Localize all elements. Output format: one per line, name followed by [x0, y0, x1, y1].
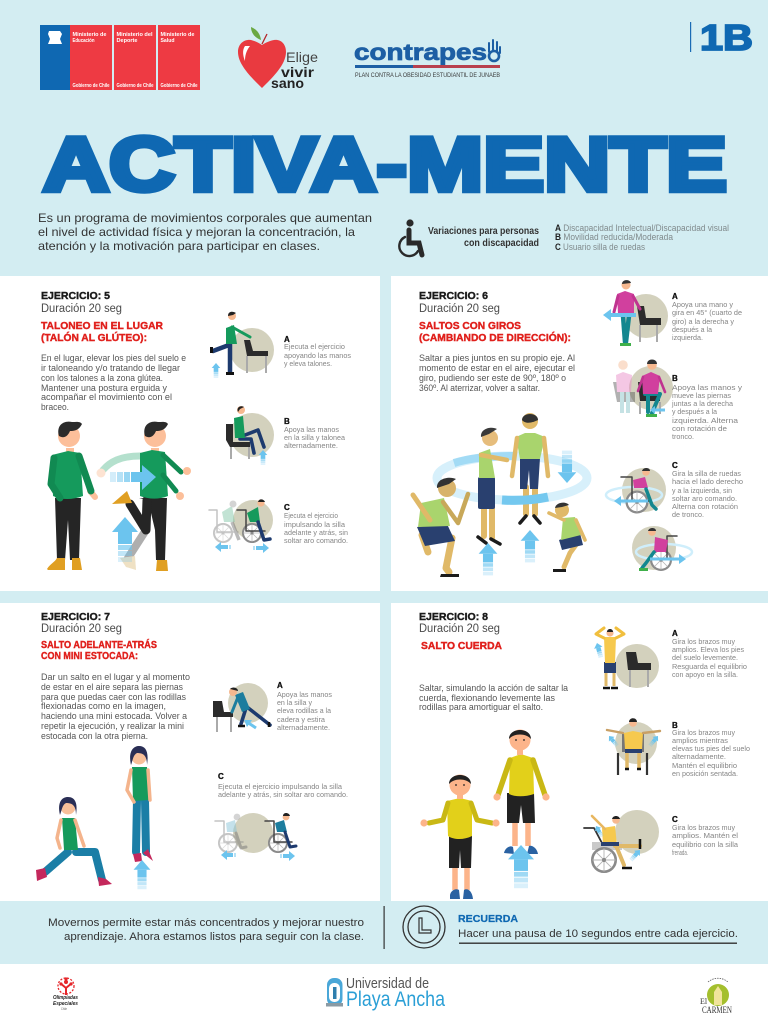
label C [284, 503, 348, 545]
exercise 7 heading: CON MINI ESTOCADA: [41, 650, 138, 662]
logo: Olimpiadas Especiales Chile: Especiales [53, 1001, 79, 1007]
label A [672, 629, 747, 679]
illustration: jumping man turning [478, 428, 507, 544]
variation A: turning next to chair [603, 280, 668, 346]
label B: amplios mientras [672, 736, 728, 745]
label C: hacia el lado derecho [672, 477, 743, 486]
reminder: Hacer una pausa de 10 segundos entre cada ejercicio. [458, 928, 738, 940]
exercise 8 heading: SALTO CUERDA [421, 640, 502, 652]
arrows: jumps and landing [479, 451, 576, 575]
exercise 7 description: de estar en el aire separa las piernas [41, 682, 184, 692]
icon: clock [403, 906, 445, 948]
label A: izquierda. [672, 333, 703, 342]
label B: mueve las piernas [672, 391, 731, 400]
exercise 5 heading: Duración 20 seg [41, 303, 122, 315]
exercise 6 heading [419, 290, 571, 344]
label A: alternadamente. [277, 723, 330, 732]
exercise 7 heading: EJERCICIO: 7 [41, 611, 110, 623]
label B: B [672, 374, 678, 383]
footer band [0, 964, 768, 1024]
label A: Apoya las manos [277, 690, 332, 699]
variation C second pose: wheelchair turning left [632, 526, 692, 571]
exercise 6 description [419, 353, 575, 393]
illustration: man squatting right [549, 503, 585, 572]
exercise 5 heading: EJERCICIO: 5 [41, 290, 110, 302]
label B: en posición sentada. [672, 769, 738, 778]
logo: Elige vivir sano: sano [271, 76, 304, 91]
logo: Universidad de Playa Ancha: Universidad de [346, 976, 429, 992]
label A: A [277, 681, 283, 690]
panel: exercise 7 [0, 603, 380, 901]
exercise 8 heading: Duración 20 seg [419, 623, 500, 635]
arrow: variation B [259, 450, 267, 465]
logo: El Carmen: El [700, 997, 708, 1006]
exercise 6 heading: SALTOS CON GIROS [419, 320, 521, 332]
illustration: man standing [47, 422, 95, 570]
logo: contrapeso: contrapes [354, 39, 487, 65]
logo: Gobierno de Chile ministries: Ministerio de [72, 32, 107, 38]
label C: soltar aro comando. [284, 536, 348, 545]
variation A: arms up with chair [593, 628, 659, 688]
logo: Elige vivir sano: Elige [286, 50, 318, 65]
level badge 1B: 1B [700, 17, 753, 58]
label C: Ejecuta el ejercicio impulsando la silla [218, 782, 343, 791]
label C: C [672, 461, 678, 470]
label C: equilibrio con la silla [672, 840, 739, 849]
label C: adelante y atrás, sin soltar aro comando. [218, 790, 348, 799]
logo: Gobierno de Chile ministries: Ministerio del [116, 32, 153, 38]
label A: del suelo levemente. [672, 653, 738, 662]
exercise 7 description: flexionadas como en la imagen, [41, 701, 166, 711]
illustration: woman jumping [127, 746, 153, 862]
exercise 7 heading: Duración 20 seg [41, 623, 122, 635]
exercise 5 description: con los talones a la zona glútea. [41, 373, 163, 383]
legend of variations [555, 223, 729, 252]
label C: C [672, 815, 678, 824]
wheelchair variations caption: Variaciones para personas [428, 226, 539, 237]
exercise 7 description: Dar un salto en el lugar y al momento [41, 672, 190, 682]
label A: A [672, 629, 678, 638]
logo: Gobierno de Chile ministries: Gobierno de Chile [72, 83, 110, 89]
intro text: el nivel de actividad física y mejoran la concentración, la [38, 226, 356, 239]
label C: frenada. [672, 848, 688, 857]
label A: cadera y estira [277, 715, 326, 724]
exercise 6 description: Saltar a pies juntos en su propio eje. Al [419, 353, 575, 363]
closing message: Movernos permite estar más concentrados y mejorar nuestro [48, 917, 364, 929]
exercise 5 description: ir taloneando y/o tratando de llegar [41, 363, 180, 373]
variation B: seated front view [606, 718, 661, 775]
intro text: atención y la motivación para participar en clases. [38, 240, 320, 253]
legend of variations: B Movilidad reducida/Moderada [555, 232, 673, 242]
title: ACTIVA-MENTE [43, 122, 727, 208]
label B: tronco. [672, 432, 694, 441]
variation C: wheelchair forward and back [215, 813, 296, 853]
exercise 5 description [41, 353, 186, 412]
variation B: seated leg rotation [613, 360, 673, 417]
arrow: horizontal swing [110, 465, 156, 490]
exercise 7 description [41, 672, 190, 741]
exercise 5 description: Mantener una postura erguida y [41, 383, 168, 393]
exercise 6 heading: EJERCICIO: 6 [419, 290, 488, 302]
arrows: variation C [221, 850, 295, 861]
logo: contrapeso: PLAN CONTRA LA OBESIDAD ESTUDIANTIL DE JUNAEB [355, 72, 500, 79]
label A: Apoya una mano y [672, 300, 733, 309]
label A: Resguarda el equilibrio [672, 662, 747, 671]
label C: Gira la silla de ruedas [672, 469, 741, 478]
illustration: rotation ring front [502, 497, 548, 500]
label C: de tronco. [672, 510, 704, 519]
label B [672, 721, 750, 778]
label A: después a la [672, 325, 713, 334]
logo: Gobierno de Chile ministries: Deporte [116, 38, 138, 44]
logo: Olimpiadas Especiales Chile: Chile [61, 1006, 68, 1011]
variation A: standing with chair [210, 312, 274, 375]
logo: El Carmen: CARMEN [702, 1005, 732, 1015]
logo: Universidad de Playa Ancha: Playa Ancha [346, 988, 445, 1011]
intro text [38, 212, 372, 253]
wheelchair variations caption: con discapacidad [464, 238, 539, 249]
wheelchair variations caption [428, 226, 539, 249]
reminder [458, 913, 738, 944]
logo: Gobierno de Chile ministries: Salud [160, 38, 174, 44]
variation C: wheelchair forward and back [209, 499, 273, 542]
label B: alternadamente. [672, 752, 726, 761]
label C: Alterna con rotación [672, 502, 738, 511]
label C: y a la izquierda, sin [672, 486, 732, 495]
arrow: heel raise up [112, 517, 138, 562]
exercise 7 description: estocada con la otra pierna. [41, 731, 148, 741]
logo: Gobierno de Chile ministries: Educación [72, 38, 94, 44]
exercise 5 description: acompañar el movimiento con el [41, 392, 172, 402]
exercise 5 heading: (TALÓN AL GLÚTEO): [41, 331, 147, 344]
closing message [48, 917, 364, 943]
label B: y después a la [672, 407, 718, 416]
logo: Gobierno de Chile ministries: Gobierno de Chile [160, 83, 198, 89]
illustration: man raising heel [96, 422, 191, 571]
label A: gira en 45° (cuarto de [672, 308, 742, 317]
exercise 5 heading [41, 290, 163, 344]
label A [277, 681, 332, 732]
exercise 5 heading: TALONEO EN EL LUGAR [41, 320, 163, 332]
label B: en la silla y talonea [284, 433, 346, 442]
label B: B [672, 721, 678, 730]
logo: Gobierno de Chile ministries: Gobierno de Chile [116, 83, 154, 89]
label A [672, 292, 742, 342]
label C [218, 772, 348, 799]
panel: exercise 6 [391, 276, 768, 591]
variation A: lunge with chair [213, 683, 270, 732]
label C: amplios. Mantén el [672, 831, 738, 840]
illustration: rotation ring back [437, 456, 587, 500]
exercise 6 description: 360º. Al aterrizar, volver a saltar. [419, 383, 540, 393]
label A: A [284, 335, 290, 344]
label B: izquierda. Alterna [672, 416, 739, 425]
logo: Gobierno de Chile ministries: Ministerio de [160, 32, 195, 38]
variation C: wheelchair side view [584, 810, 659, 872]
exercise 5 description: En el lugar, elevar los pies del suelo e [41, 353, 186, 363]
exercise 6 description: momento de estar en el aire, ejecutar el [419, 363, 575, 373]
logo: Universidad de Playa Ancha [326, 976, 445, 1011]
label C: C [284, 503, 290, 512]
label A: Gira los brazos muy [672, 637, 735, 646]
exercise 7 heading [41, 611, 157, 662]
logo: Olimpiadas Especiales Chile: Olimpíadas [53, 995, 79, 1001]
label B: Mantén el equilibrio [672, 761, 737, 770]
reminder: RECUERDA [458, 913, 518, 925]
exercise 8 description: rodillas para amortiguar el salto. [419, 702, 543, 712]
exercise 7 description: haciendo una mini estocada. Volver a [41, 711, 187, 721]
logo: Elige vivir sano: vivir [281, 64, 315, 80]
label A: amplios. Eleva los pies [672, 645, 744, 654]
intro text: Es un programa de movimientos corporales que aumentan [38, 212, 372, 225]
label C [672, 461, 743, 519]
label C: C [218, 772, 224, 781]
arrow: rope jump [508, 845, 534, 888]
illustration: jumping man from back [512, 413, 548, 523]
label B: elevas tus pies del suelo [672, 744, 750, 753]
logo: Gobierno de Chile ministries [40, 25, 200, 90]
label A: A [672, 292, 678, 301]
exercise 7 heading: SALTO ADELANTE-ATRÁS [41, 638, 157, 651]
legend of variations: A Discapacidad Intelectual/Discapacidad visual [555, 223, 729, 233]
label C: adelante y atrás, sin [284, 528, 348, 537]
label B: alternadamente. [284, 441, 338, 450]
label A: Ejecuta el ejercicio [284, 342, 345, 351]
label B: juntas a la derecha [671, 399, 734, 408]
variation B: seated on chair [226, 406, 274, 459]
illustration: woman in lunge [36, 797, 112, 886]
label C: Gira los brazos muy [672, 823, 735, 832]
exercise 8 description: Saltar, simulando la acción de saltar la [419, 683, 568, 693]
label B [284, 417, 346, 450]
label B: B [284, 417, 290, 426]
legend of variations: C Usuario silla de ruedas [555, 242, 646, 252]
label B: con rotación de [672, 424, 727, 433]
exercise 5 description: braceo. [41, 402, 69, 412]
label B: Apoya las manos y [672, 383, 742, 392]
exercise 6 description: giro, pudiendo ser este de 90º, 180º o [419, 373, 566, 383]
logo: Elige vivir sano [238, 27, 318, 91]
illustration: man squatting left [413, 478, 468, 577]
label B [671, 374, 742, 441]
label B: Apoya las manos [284, 425, 339, 434]
arrow: variation A [212, 363, 220, 378]
variation C: wheelchair turning right [606, 468, 666, 512]
label C: impulsando la silla [284, 520, 346, 529]
label B: Gira los brazos muy [672, 728, 735, 737]
label A: eleva rodillas a la [277, 706, 332, 715]
label A [284, 335, 351, 368]
icon: wheelchair user [399, 219, 422, 256]
label A: con apoyo en la silla. [672, 670, 738, 679]
exercise 8 heading [419, 611, 502, 652]
exercise 8 description [419, 683, 568, 712]
label C: soltar aro comando. [672, 494, 737, 503]
closing message: aprendizaje. Ahora estamos listos para seguir con la clase. [64, 931, 364, 943]
arrow: lunge jump [134, 860, 150, 889]
exercise 6 heading: Duración 20 seg [419, 303, 500, 315]
label C [672, 815, 739, 857]
label A: giro) a la derecha y [672, 317, 734, 326]
label A: apoyando las manos [284, 351, 351, 360]
arrows: variation C [215, 542, 269, 553]
label A: y eleva talones. [284, 359, 332, 368]
logo: contrapeso [354, 39, 500, 79]
illustration: boy arms out [420, 774, 500, 899]
illustration: tall boy jumping [493, 730, 550, 854]
label A: en la silla y [277, 698, 312, 707]
exercise 8 description: cuerda, flexionando levemente las [419, 693, 556, 703]
exercise 6 heading: (CAMBIANDO DE DIRECCIÓN): [419, 331, 571, 344]
label C: Ejecuta el ejercicio [284, 511, 338, 520]
logo: El Carmen [700, 978, 732, 1015]
exercise 7 description: repetir la ejecución, y realizar la mini [41, 721, 184, 731]
exercise 7 description: para que puedas caer con las rodillas [41, 692, 187, 702]
panel: exercise 5 [0, 276, 380, 591]
logo: Olimpiadas Especiales Chile [53, 977, 79, 1011]
exercise 8 heading: EJERCICIO: 8 [419, 611, 488, 623]
panel: exercise 8 [391, 603, 768, 901]
